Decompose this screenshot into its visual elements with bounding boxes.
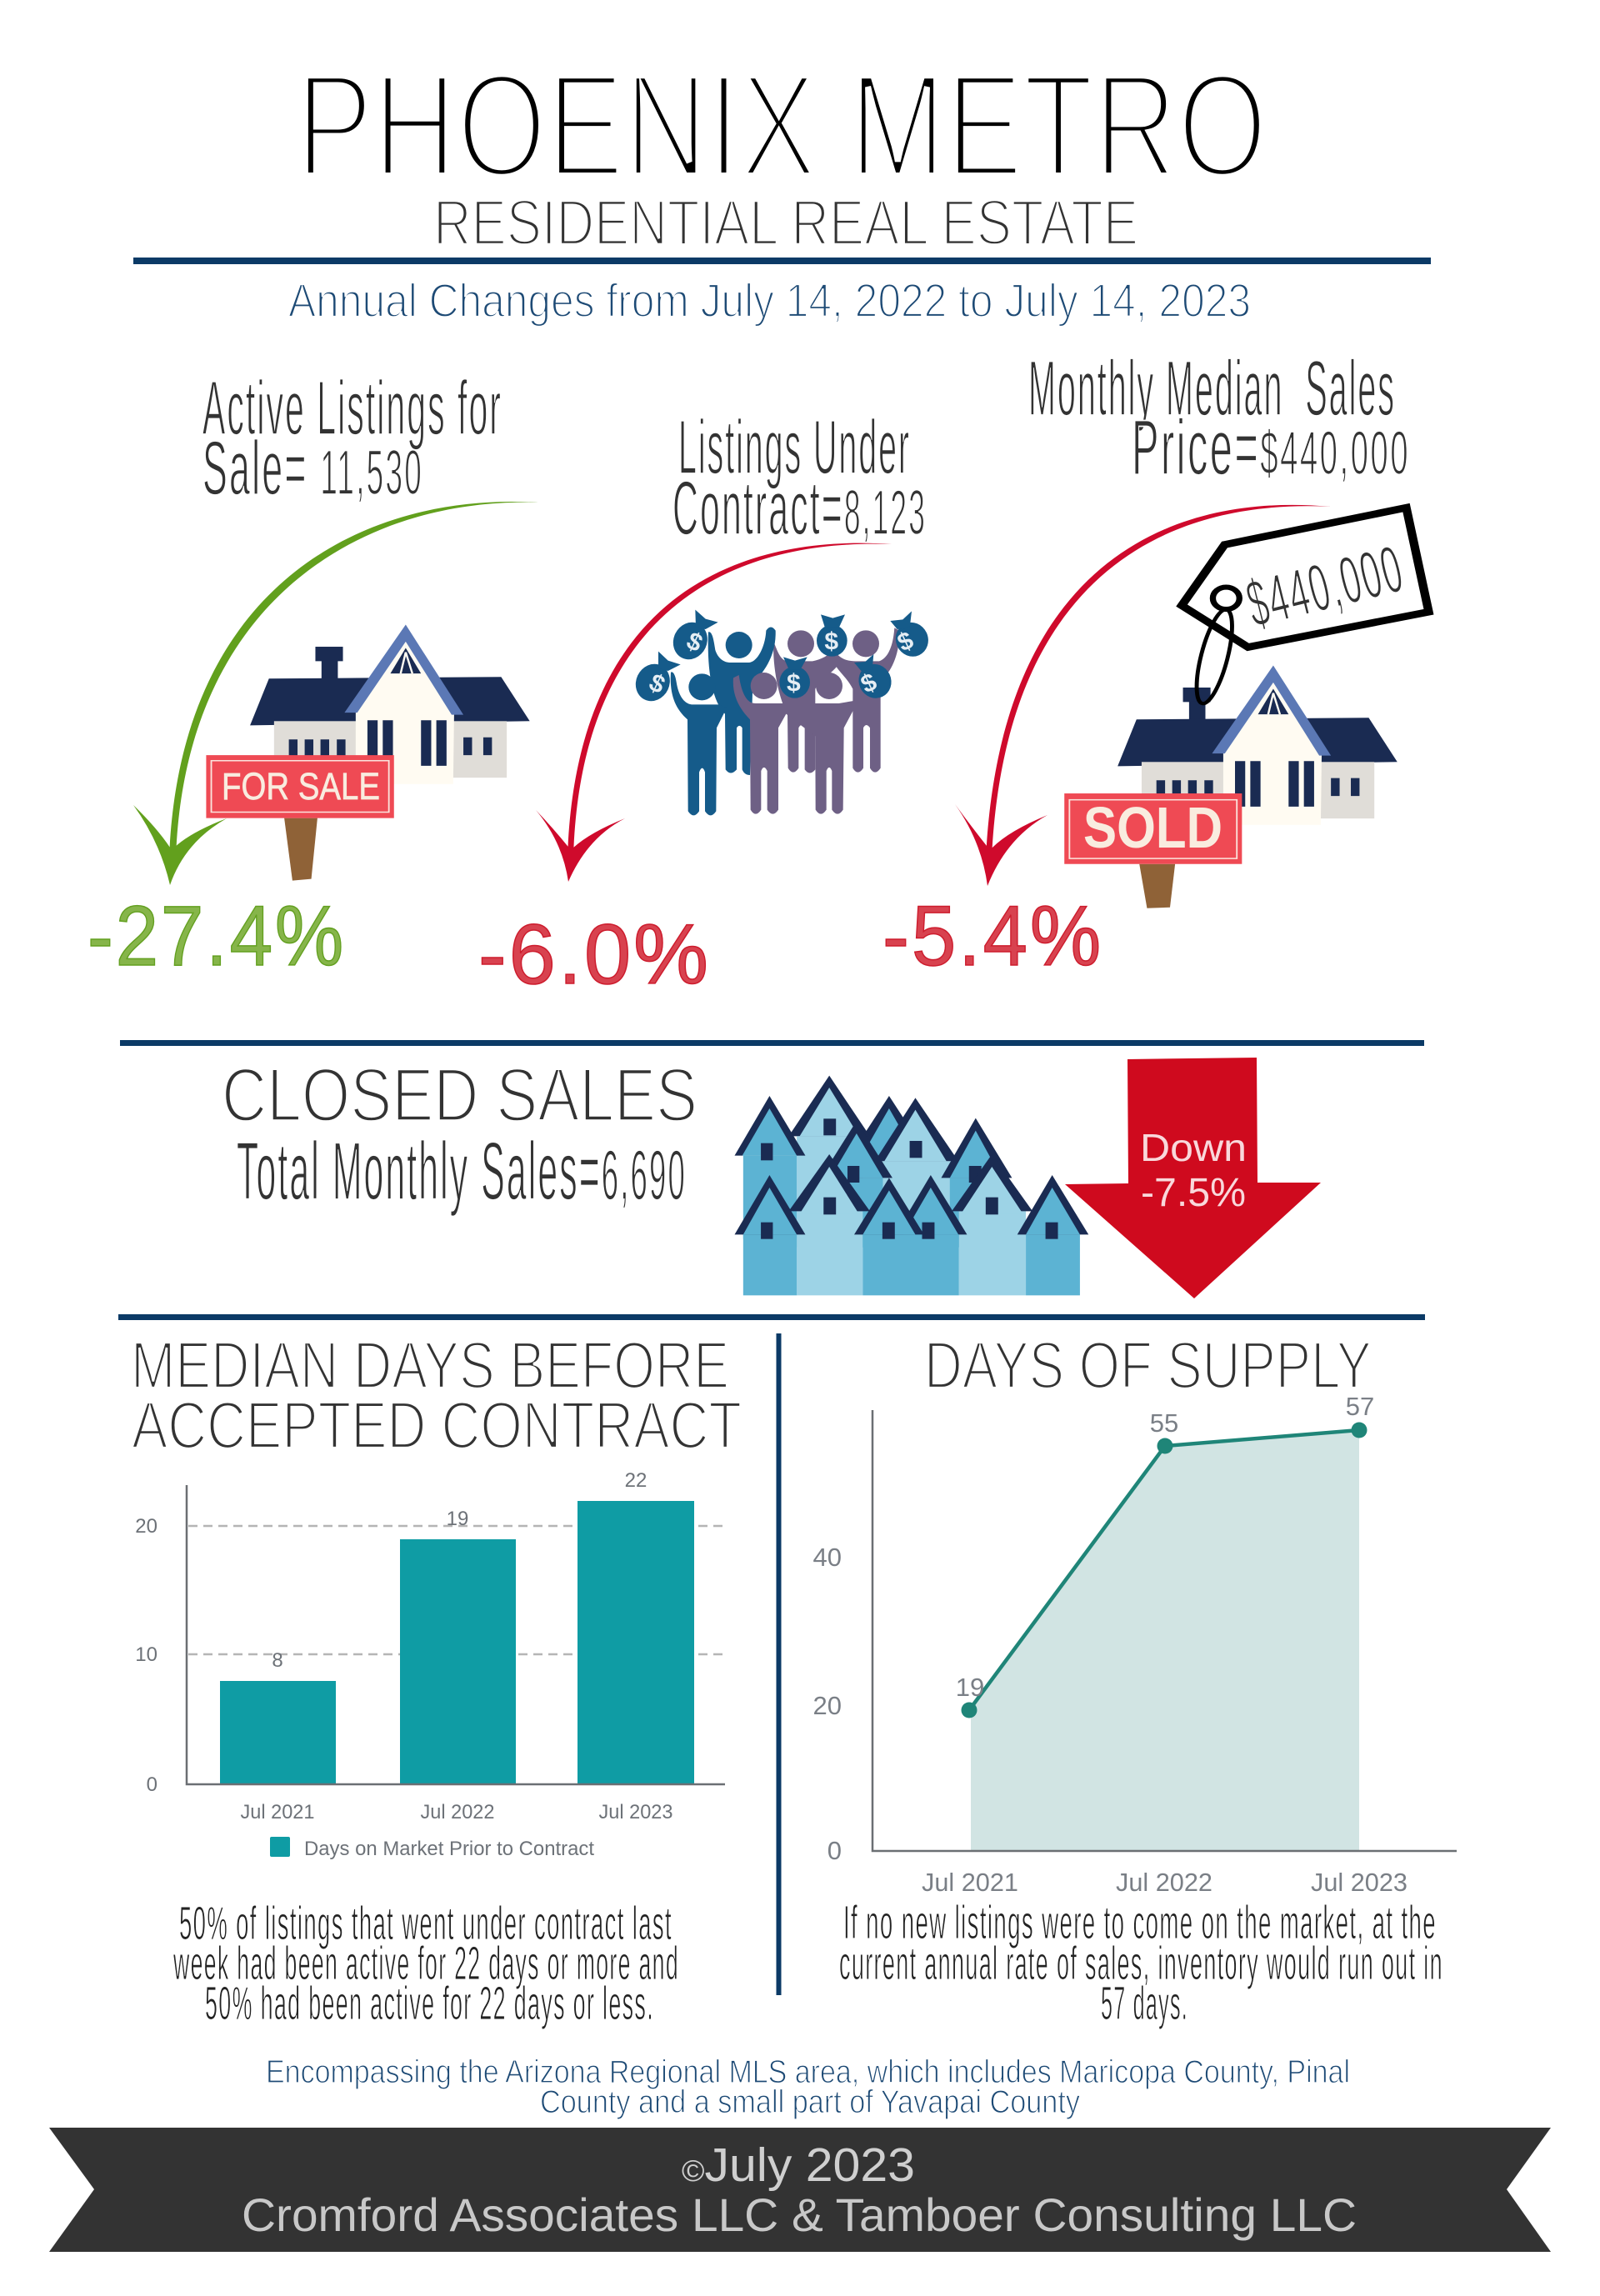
y axis labels: 20 bbox=[813, 1691, 842, 1720]
under contract label bbox=[672, 405, 927, 551]
x axis labels: Jul 2022 bbox=[1116, 1868, 1212, 1897]
value labels: 22 bbox=[625, 1469, 647, 1492]
coverage note: County and a small part of Yavapai County bbox=[540, 2084, 1080, 2120]
median days note bbox=[173, 1897, 679, 2030]
down callout text: Down bbox=[1140, 1126, 1247, 1169]
active listings label: Sale= 11,530 bbox=[202, 426, 423, 511]
panel: median days before accepted contract bbox=[131, 1328, 742, 2030]
x axis labels: Jul 2021 bbox=[922, 1868, 1018, 1897]
down callout text: -7.5% bbox=[1141, 1171, 1246, 1215]
panel: median sales price bbox=[882, 344, 1428, 983]
sold sign text: SOLD bbox=[1083, 795, 1222, 860]
text: Listings Under bbox=[678, 405, 911, 490]
down callout text bbox=[1140, 1126, 1247, 1215]
title: PHOENIX METRO bbox=[296, 43, 1268, 208]
closed sales heading: CLOSED SALES bbox=[222, 1053, 698, 1138]
panel: median days before accepted contract: 50% had been active for 22 days or less. bbox=[205, 1977, 654, 2030]
panel: listings under contract bbox=[478, 405, 934, 1002]
arrow: green down bbox=[133, 502, 538, 885]
median price label bbox=[1028, 344, 1410, 491]
x axis labels bbox=[240, 1801, 673, 1823]
x axis labels bbox=[922, 1868, 1408, 1897]
money bags bbox=[630, 610, 934, 707]
icon: house sold bbox=[1118, 665, 1398, 825]
icon: price tag bbox=[1182, 508, 1428, 706]
icon: sold sign bbox=[1064, 793, 1242, 908]
dollar signs: $ bbox=[645, 668, 669, 699]
x axis labels: Jul 2023 bbox=[598, 1801, 673, 1823]
company credits: Cromford Associates LLC & Tamboer Consulting LLC bbox=[242, 2188, 1357, 2241]
median days heading: MEDIAN DAYS BEFORE bbox=[131, 1328, 729, 1402]
copyright line: ©July 2023 bbox=[682, 2138, 915, 2192]
value labels: 57 bbox=[1346, 1392, 1374, 1421]
y axis labels bbox=[135, 1515, 158, 1796]
date range subheading: Annual Changes from July 14, 2022 to July 14, 2023 bbox=[288, 274, 1251, 328]
value labels: 8 bbox=[272, 1649, 283, 1672]
y axis labels: 20 bbox=[135, 1515, 158, 1538]
coverage note: Encompassing the Arizona Regional MLS area, which includes Maricopa County, Pinal bbox=[266, 2054, 1350, 2090]
y axis labels: 0 bbox=[828, 1836, 842, 1865]
value labels: 19 bbox=[956, 1673, 984, 1702]
arrow: red down bbox=[536, 543, 892, 882]
dollar signs: $ bbox=[787, 669, 801, 697]
under contract label: Contract=8,123 bbox=[672, 466, 927, 551]
price tag text: $440,000 bbox=[1239, 531, 1411, 641]
panel: closed sales bbox=[222, 1053, 1321, 1298]
text: Active Listings for bbox=[202, 366, 502, 451]
value labels: 55 bbox=[1150, 1408, 1178, 1438]
median price label: Price=$440,000 bbox=[1132, 403, 1410, 491]
icon: people holding money bags bbox=[630, 610, 934, 815]
bars bbox=[220, 1501, 694, 1783]
median days heading: ACCEPTED CONTRACT bbox=[132, 1388, 742, 1462]
area line chart bbox=[813, 1392, 1457, 1897]
panel: days of supply bbox=[813, 1328, 1457, 2030]
percent: active listings change: -27.4% bbox=[88, 888, 346, 983]
bar chart bbox=[135, 1469, 725, 1860]
y axis labels bbox=[813, 1543, 842, 1865]
panel: active listings bbox=[88, 366, 538, 983]
for sale sign text: FOR SALE bbox=[222, 765, 380, 808]
arrow: red down bbox=[955, 505, 1331, 886]
percent: median price change: -5.4% bbox=[882, 888, 1103, 983]
days of supply note: 57 days. bbox=[1101, 1977, 1188, 2030]
y axis labels: 0 bbox=[147, 1773, 158, 1796]
dollar signs: $ bbox=[857, 668, 881, 699]
value labels bbox=[956, 1392, 1374, 1702]
x axis labels: Jul 2021 bbox=[240, 1801, 315, 1823]
data points bbox=[962, 1422, 1367, 1718]
icon: house for sale bbox=[206, 624, 530, 881]
icon: row of houses bbox=[735, 1076, 1088, 1295]
dollar signs: $ bbox=[824, 628, 838, 655]
x axis labels: Jul 2022 bbox=[420, 1801, 495, 1823]
days of supply note bbox=[839, 1896, 1443, 2030]
panel: median days before accepted contract: 50% of listings that went under contract last bbox=[179, 1897, 672, 1950]
dollar signs: $ bbox=[682, 627, 707, 658]
panel: median days before accepted contract: week had been active for 22 days or more and bbox=[173, 1937, 679, 1990]
active listings label bbox=[202, 366, 502, 511]
y axis labels: 40 bbox=[813, 1543, 842, 1572]
median days heading bbox=[131, 1328, 742, 1462]
dollar signs: $ bbox=[893, 626, 918, 658]
subtitle: RESIDENTIAL REAL ESTATE bbox=[433, 187, 1138, 258]
x axis labels: Jul 2023 bbox=[1311, 1868, 1408, 1897]
value labels bbox=[272, 1469, 647, 1672]
days of supply heading: DAYS OF SUPPLY bbox=[924, 1328, 1372, 1402]
percent: under contract change: -6.0% bbox=[478, 907, 711, 1002]
footer banner bbox=[49, 2128, 1551, 2252]
arrow: down callout bbox=[1065, 1058, 1321, 1298]
y axis labels: 10 bbox=[135, 1643, 158, 1666]
total monthly sales: Total Monthly Sales=6,690 bbox=[237, 1125, 687, 1217]
coverage note bbox=[266, 2054, 1350, 2120]
dollar signs bbox=[645, 626, 918, 699]
legend: Days on Market Prior to Contract bbox=[304, 1838, 594, 1860]
value labels: 19 bbox=[447, 1508, 468, 1530]
